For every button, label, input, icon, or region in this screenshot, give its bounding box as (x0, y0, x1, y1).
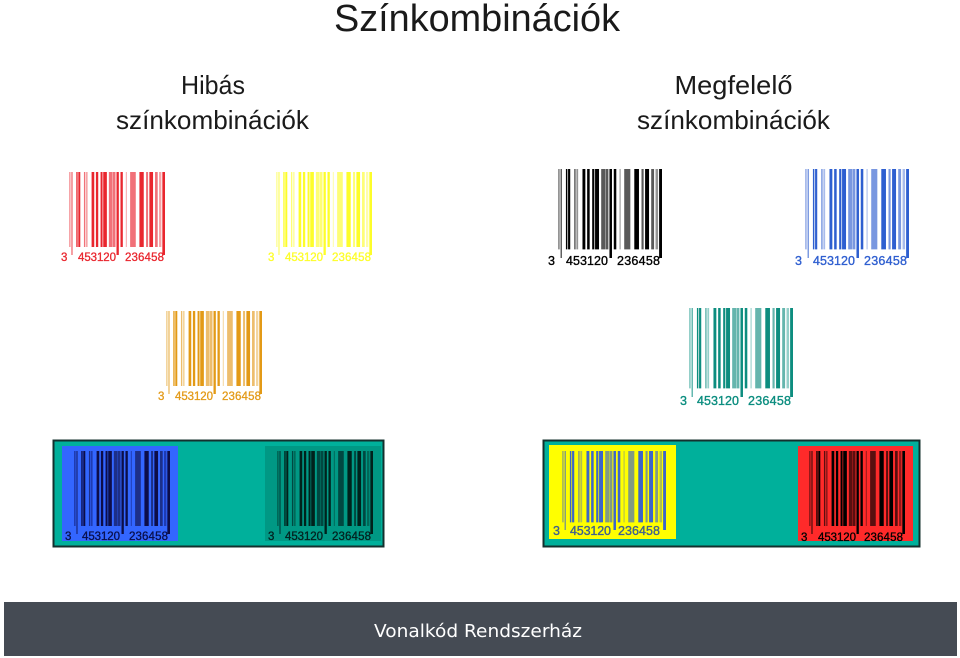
swatch: black bars on red: 3 (801, 532, 807, 544)
barcode: teal (680, 308, 793, 408)
barcode: red: 236458 (125, 252, 164, 264)
barcode: yellow: 3 (268, 252, 274, 264)
barcode: black (548, 169, 662, 268)
swatch: blue bars on yellow: 236458 (618, 524, 660, 538)
barcode: black: 453120 (566, 254, 608, 268)
swatch: blue bars on yellow (549, 445, 676, 539)
panel: wrong combinations on teal (54, 440, 384, 546)
swatch: dark bars on blue: 236458 (129, 531, 168, 543)
barcode: orange: 3 (158, 391, 164, 403)
heading: correct combinations: Megfelelő (674, 70, 792, 100)
barcode: red: 3 (61, 252, 67, 264)
barcode: yellow: 236458 (332, 252, 371, 264)
swatch: dark bars on dark teal (265, 446, 381, 543)
swatch: dark bars on blue (62, 446, 178, 543)
barcode: yellow: 453120 (285, 252, 323, 264)
footer bar (4, 602, 957, 656)
swatch: black bars on red: 236458 (864, 532, 903, 544)
barcode: blue (795, 169, 909, 268)
barcode: orange: 453120 (175, 391, 213, 403)
heading: wrong combinations (116, 70, 310, 135)
barcode: black: 3 (548, 254, 555, 268)
heading: correct combinations: színkombinációk (637, 105, 831, 135)
swatch: blue bars on yellow: 453120 (570, 524, 611, 538)
barcode: yellow (268, 172, 372, 264)
barcode: orange: 236458 (222, 391, 261, 403)
barcode: blue: 453120 (813, 254, 855, 268)
barcode: black: 236458 (617, 254, 660, 268)
barcode: red: 453120 (78, 252, 116, 264)
barcode: blue: 3 (795, 254, 802, 268)
swatch: black bars on red: 453120 (818, 532, 856, 544)
barcode: teal: 453120 (697, 394, 739, 408)
swatch: dark bars on dark teal: 236458 (332, 531, 371, 543)
barcode: red (61, 172, 165, 264)
barcode: orange (158, 311, 262, 403)
heading: wrong combinations: Hibás (181, 70, 245, 100)
barcode: teal: 236458 (748, 394, 791, 408)
heading: correct combinations (637, 70, 831, 135)
swatch: dark bars on dark teal: 3 (268, 531, 274, 543)
swatch: dark bars on blue: 453120 (82, 531, 120, 543)
swatch: black bars on red (798, 446, 913, 544)
heading: wrong combinations: színkombinációk (116, 105, 310, 135)
swatch: dark bars on blue: 3 (65, 531, 71, 543)
barcode: teal: 3 (680, 394, 687, 408)
panel: correct combinations on teal (544, 440, 920, 546)
swatch: blue bars on yellow: 3 (553, 524, 560, 538)
barcode: blue: 236458 (864, 254, 907, 268)
swatch: dark bars on dark teal: 453120 (285, 531, 323, 543)
footer bar: Vonalkód Rendszerház (374, 621, 582, 642)
